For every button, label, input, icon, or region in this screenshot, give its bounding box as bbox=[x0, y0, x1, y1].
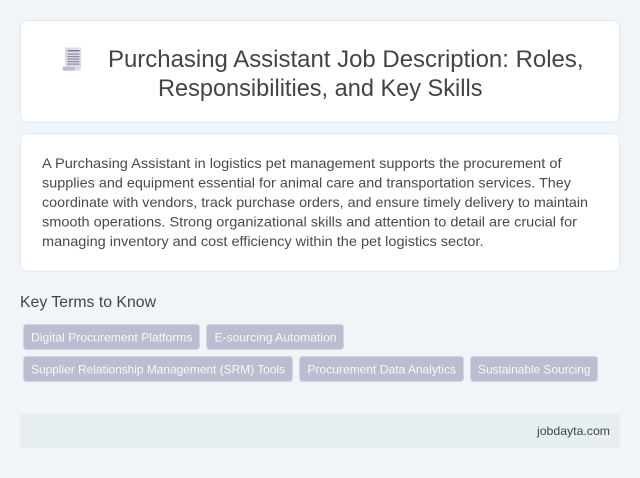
tag: procurement data analytics bbox=[300, 356, 464, 382]
tag: supplier relationship management tools: Supplier Relationship Management (SRM) Tools bbox=[31, 362, 285, 376]
tags: key terms list bbox=[24, 324, 598, 382]
tag: e-sourcing automation: E-sourcing Automation bbox=[214, 330, 336, 344]
title: Responsibilities, and Key Skills bbox=[158, 75, 482, 102]
tag: e-sourcing automation bbox=[206, 324, 344, 350]
footer: site name: jobdayta.com bbox=[536, 424, 610, 438]
text block: description paragraph: managing inventory and cost efficiency within the pet logistics sector. bbox=[42, 233, 484, 249]
text block: description paragraph bbox=[42, 155, 588, 249]
text block: description paragraph: supplies and equipment essential for animal care and transportation services. They bbox=[42, 174, 571, 190]
tag: procurement data analytics: Procurement Data Analytics bbox=[308, 362, 456, 376]
tag: digital procurement platforms bbox=[24, 324, 200, 350]
title: Purchasing Assistant Job Description: Roles, bbox=[108, 46, 584, 73]
title bbox=[108, 46, 584, 102]
tag: sustainable sourcing bbox=[470, 356, 598, 382]
tag: supplier relationship management tools bbox=[24, 356, 292, 382]
heading: key terms: Key Terms to Know bbox=[20, 294, 156, 311]
text block: description paragraph: A Purchasing Assistant in logistics pet management supports the procurement of bbox=[42, 155, 562, 171]
text block: description paragraph: smooth operations. Strong organizational skills and attention to detail are crucial for bbox=[42, 214, 577, 230]
tag: digital procurement platforms: Digital Procurement Platforms bbox=[31, 330, 192, 344]
text block: description paragraph: coordinate with vendors, track purchase orders, and ensure timely delivery to maintain bbox=[42, 194, 588, 210]
icon: receipt document bbox=[62, 48, 81, 71]
footer bbox=[20, 414, 620, 448]
panel: description bbox=[20, 134, 620, 271]
panel: title card bbox=[20, 20, 620, 122]
tag: sustainable sourcing: Sustainable Sourcing bbox=[478, 362, 590, 376]
